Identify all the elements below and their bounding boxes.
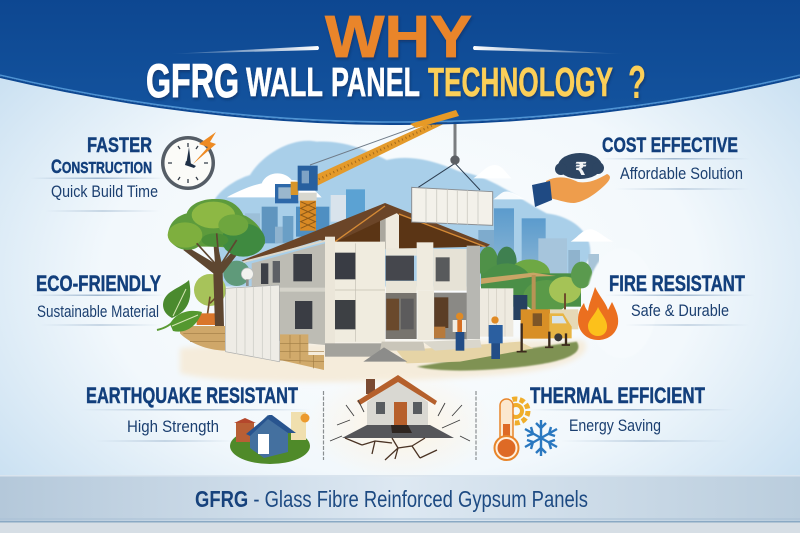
heading: cost effective: COST EFFECTIVE xyxy=(602,133,738,157)
icon: clock with lightning bolt xyxy=(161,132,216,190)
feature: earthquake resistant xyxy=(80,383,310,442)
steps xyxy=(380,342,425,351)
title: GFRG Wall Panel Technology xyxy=(146,54,646,108)
heading: thermal efficient: THERMAL EFFICIENT xyxy=(530,383,705,408)
divider xyxy=(322,391,324,460)
feature: fire resistant: Safe & Durable xyxy=(631,302,729,320)
centre column xyxy=(380,210,399,249)
title: GFRG Wall Panel Technology: ? xyxy=(628,56,646,108)
big tree xyxy=(168,199,265,327)
feature: faster construction xyxy=(30,134,165,212)
heading: fire resistant: FIRE RESISTANT xyxy=(609,271,745,296)
icon: flame xyxy=(578,287,618,340)
footer band xyxy=(0,475,800,533)
city skyline xyxy=(245,189,599,276)
leaning wall panel xyxy=(226,285,279,362)
roof xyxy=(242,203,400,263)
satellite dish xyxy=(241,268,253,286)
canopy and truck xyxy=(481,273,578,352)
white fade near flame xyxy=(587,248,657,358)
ground xyxy=(180,340,586,382)
icon: small blue house on grass xyxy=(230,412,310,464)
crane tip over banner xyxy=(410,110,459,128)
white panels xyxy=(325,237,335,355)
feature: cost effective: Affordable Solution xyxy=(620,165,743,183)
feature: faster construction: CONSTRUCTION xyxy=(51,157,152,178)
house under construction xyxy=(242,203,513,357)
heading: eco-friendly: ECO-FRIENDLY xyxy=(36,271,161,296)
crane xyxy=(275,111,459,231)
icon: house on cracked ground xyxy=(330,375,470,460)
header banner xyxy=(0,0,800,128)
heading: faster construction: FASTER xyxy=(87,134,152,157)
earthquake panel background xyxy=(305,370,495,480)
feature: thermal efficient xyxy=(530,383,735,442)
gravel pile xyxy=(363,347,407,362)
feature: eco-friendly: Sustainable Material xyxy=(37,303,159,321)
workers xyxy=(453,313,503,359)
sky and clouds xyxy=(211,141,613,287)
icon: hand holding rupee xyxy=(532,153,610,207)
feature: thermal efficient: Energy Saving xyxy=(569,417,661,435)
central construction illustration xyxy=(168,111,657,382)
title: GFRG Wall Panel Technology: PANEL xyxy=(331,59,420,105)
feature: earthquake resistant: High Strength xyxy=(127,418,219,436)
icon: hand holding rupee: ₹ xyxy=(575,159,587,180)
right background trees xyxy=(478,247,592,313)
feature: fire resistant xyxy=(605,271,755,326)
footer text: GFRG - Glass Fibre Reinforced Gypsum Panels xyxy=(195,486,588,512)
stacked bricks xyxy=(180,326,324,370)
accent strokes beside WHY xyxy=(168,46,319,54)
icon: leaves xyxy=(157,280,202,332)
title: GFRG Wall Panel Technology: GFRG xyxy=(146,54,239,107)
heading: earthquake resistant: EARTHQUAKE RESISTANT xyxy=(86,383,298,408)
divider xyxy=(475,391,477,460)
icon: thermometer with sun and snowflake xyxy=(494,399,557,460)
gable underside xyxy=(335,208,483,250)
feature: eco-friendly xyxy=(30,271,165,326)
title: GFRG Wall Panel Technology: TECHNOLOGY xyxy=(428,59,613,105)
feature: cost effective xyxy=(600,133,750,190)
feature: faster construction: Quick Build Time xyxy=(51,183,158,201)
left wing wall xyxy=(252,243,325,345)
title: WHY: WHY xyxy=(325,4,472,70)
title: GFRG Wall Panel Technology: WALL xyxy=(246,59,323,105)
hanging panel and hook xyxy=(412,120,493,225)
